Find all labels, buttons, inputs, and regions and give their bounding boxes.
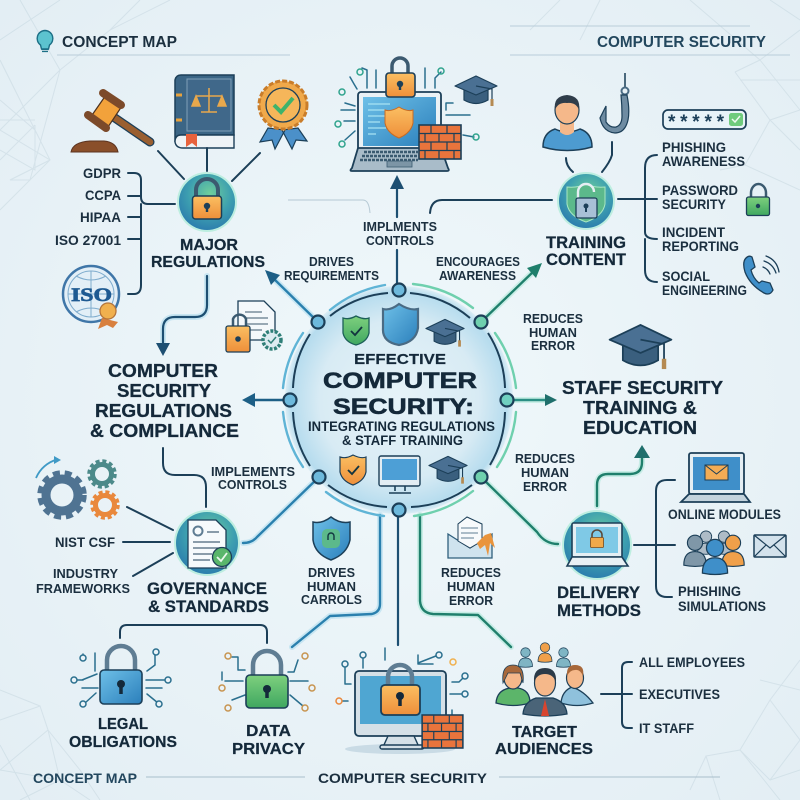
icon: group of people [684, 531, 744, 574]
icon: open envelope [448, 517, 495, 558]
label: phishing simulations [678, 583, 766, 614]
training topics [662, 139, 747, 298]
bracket: legal and privacy [120, 625, 267, 643]
center title: EFFECTIVE [354, 351, 446, 368]
icon: people group [496, 643, 593, 716]
training topics: SECURITY [662, 196, 727, 212]
heading: staff security training and education: EDUCATION [583, 418, 697, 438]
connector lines [566, 142, 657, 282]
header: computer security: COMPUTER SECURITY [597, 34, 766, 51]
heading: computer security regulations and compliance: COMPUTER [108, 361, 218, 381]
center title: COMPUTER [323, 368, 477, 393]
icon: green lock [746, 184, 770, 216]
relationship labels: CARROLS [301, 592, 362, 607]
center title: & STAFF TRAINING [342, 432, 463, 448]
side labels: NIST CSF [55, 534, 115, 550]
icon: laptop with envelope [681, 453, 750, 502]
icon: graduation cap [429, 456, 467, 484]
icon: monitor with lock and firewall [336, 648, 468, 754]
connectors from hub [156, 175, 650, 647]
icon: blue lock [71, 646, 171, 707]
relationship labels: HUMAN [529, 325, 577, 340]
footer [33, 770, 720, 786]
label [495, 724, 593, 758]
relationship labels: REDUCES [515, 451, 575, 466]
icon: blue shield with lock [313, 517, 350, 560]
node circle [562, 510, 632, 580]
audience list: IT STAFF [639, 720, 694, 736]
icon: fishing hook [600, 73, 629, 133]
ring nodes [284, 284, 514, 516]
icon: monitor [379, 456, 420, 493]
icon: gavel [71, 93, 150, 152]
relationship labels: REDUCES [523, 311, 583, 326]
relationship labels: DRIVES [308, 565, 355, 580]
connector lines [634, 480, 675, 597]
relationship labels: AWARENESS [439, 268, 516, 283]
label: data privacy: DATA [246, 723, 291, 740]
icon: envelope [754, 535, 786, 557]
icon: lightbulb [37, 30, 53, 52]
heading: computer security regulations and compliance [90, 361, 239, 441]
node: governance and standards [36, 456, 269, 616]
label: TARGET [512, 724, 577, 741]
training topics: INCIDENT [662, 224, 725, 240]
relationship labels: CONTROLS [366, 233, 434, 248]
bracket [601, 662, 632, 728]
center title [308, 351, 495, 448]
heading: computer security regulations and compliance: SECURITY [117, 381, 211, 401]
relationship labels: ERROR [531, 338, 576, 353]
label: legal obligations: LEGAL [98, 716, 148, 733]
label [546, 233, 627, 269]
label [147, 579, 269, 616]
relationship labels: ENCOURAGES [436, 254, 520, 269]
label: data privacy: PRIVACY [232, 741, 305, 758]
relationship labels: IMPLEMENTS [211, 464, 295, 479]
icon: phone [744, 256, 779, 294]
label: TRAINING [546, 233, 626, 252]
icon: password field: ***** [668, 112, 725, 133]
icon: orange shield [340, 455, 366, 485]
header: computer security [510, 26, 790, 55]
heading: computer security regulations and compliance: REGULATIONS [95, 401, 232, 421]
training topics: PASSWORD [662, 182, 738, 198]
training topics: SOCIAL [662, 268, 710, 284]
relationship labels: HUMAN [447, 579, 495, 594]
header: concept map [37, 30, 290, 55]
relationship labels: REDUCES [441, 565, 501, 580]
footer: COMPUTER SECURITY [318, 770, 488, 786]
regulation bracket [128, 173, 175, 294]
training topics: REPORTING [662, 238, 739, 254]
relationship labels: ERROR [523, 479, 568, 494]
relationship labels: CONTROLS [218, 477, 287, 492]
node: major regulations [55, 75, 307, 329]
audience list: EXECUTIVES [639, 686, 720, 702]
icon: blue shield [383, 304, 418, 345]
regulation list: HIPAA [80, 209, 121, 225]
connector lines [123, 507, 173, 576]
icon: graduation cap large [610, 325, 671, 369]
icon: green lock [219, 651, 315, 711]
footer: CONCEPT MAP [33, 770, 137, 786]
icon: person [543, 95, 592, 150]
heading: computer security regulations and compliance: & COMPLIANCE [90, 421, 239, 441]
node circle [177, 172, 237, 232]
label: online modules: ONLINE MODULES [668, 506, 781, 522]
label: DELIVERY [557, 583, 641, 602]
icon: document, lock and gear [226, 301, 281, 352]
connector glow [163, 269, 642, 647]
relationship labels: DRIVES [309, 254, 354, 269]
regulation list: CCPA [85, 187, 121, 203]
heading: staff security training and education [562, 378, 723, 438]
ring: outer coloured arcs [283, 284, 516, 516]
icon: green shield [343, 316, 369, 345]
side labels: FRAMEWORKS [36, 581, 130, 596]
relationship labels: REQUIREMENTS [284, 268, 379, 283]
training topics: AWARENESS [662, 153, 745, 169]
node circle [174, 510, 240, 576]
label: REGULATIONS [151, 254, 265, 271]
icon: ISO seal: ISO [71, 285, 112, 306]
header: concept map: CONCEPT MAP [62, 34, 177, 51]
icon: ISO seal [63, 266, 119, 329]
icon: award badge [259, 81, 307, 149]
audience list [639, 654, 745, 736]
label [151, 237, 265, 271]
connector lines [158, 148, 260, 181]
label: GOVERNANCE [147, 579, 267, 598]
side labels [36, 534, 130, 596]
heading: staff security training and education: TRAINING & [583, 398, 697, 418]
center title: INTEGRATING REGULATIONS [308, 418, 495, 434]
side labels: INDUSTRY [53, 566, 118, 581]
training topics: PHISHING [662, 139, 726, 155]
heading: staff security training and education: STAFF SECURITY [562, 378, 723, 398]
label: phishing simulations: SIMULATIONS [678, 598, 766, 614]
icon: graduation cap [426, 319, 464, 347]
regulation list [55, 165, 121, 248]
relationship labels: HUMAN [307, 579, 356, 594]
center title: SECURITY: [333, 394, 474, 419]
node: target audiences [495, 643, 745, 758]
label: legal obligations [69, 716, 177, 751]
label: legal obligations: OBLIGATIONS [69, 734, 177, 751]
label: CONTENT [546, 250, 627, 269]
relationship labels: IMPLMENTS [363, 219, 437, 234]
regulation list: ISO 27001 [55, 232, 121, 248]
relationship labels: ERROR [449, 593, 494, 608]
central hub [283, 284, 516, 516]
training topics: ENGINEERING [662, 282, 747, 298]
icon: law book [175, 75, 234, 148]
label: MAJOR [180, 237, 238, 254]
label [557, 583, 641, 620]
audience list: ALL EMPLOYEES [639, 654, 745, 670]
node circle [557, 172, 615, 230]
label: AUDIENCES [495, 741, 593, 758]
relationship labels [211, 219, 583, 608]
node: training content [543, 73, 779, 298]
node: delivery methods [557, 453, 786, 620]
ring: inner dark arcs [293, 293, 505, 507]
icon: laptop with lock and firewall [335, 58, 497, 171]
icon: gears [36, 456, 118, 518]
relationship labels: HUMAN [521, 465, 569, 480]
label: phishing simulations: PHISHING [678, 583, 741, 599]
label: data privacy [232, 723, 305, 758]
label: METHODS [557, 601, 641, 620]
icon: password field [663, 110, 746, 133]
label: & STANDARDS [148, 597, 269, 616]
regulation list: GDPR [83, 165, 121, 181]
